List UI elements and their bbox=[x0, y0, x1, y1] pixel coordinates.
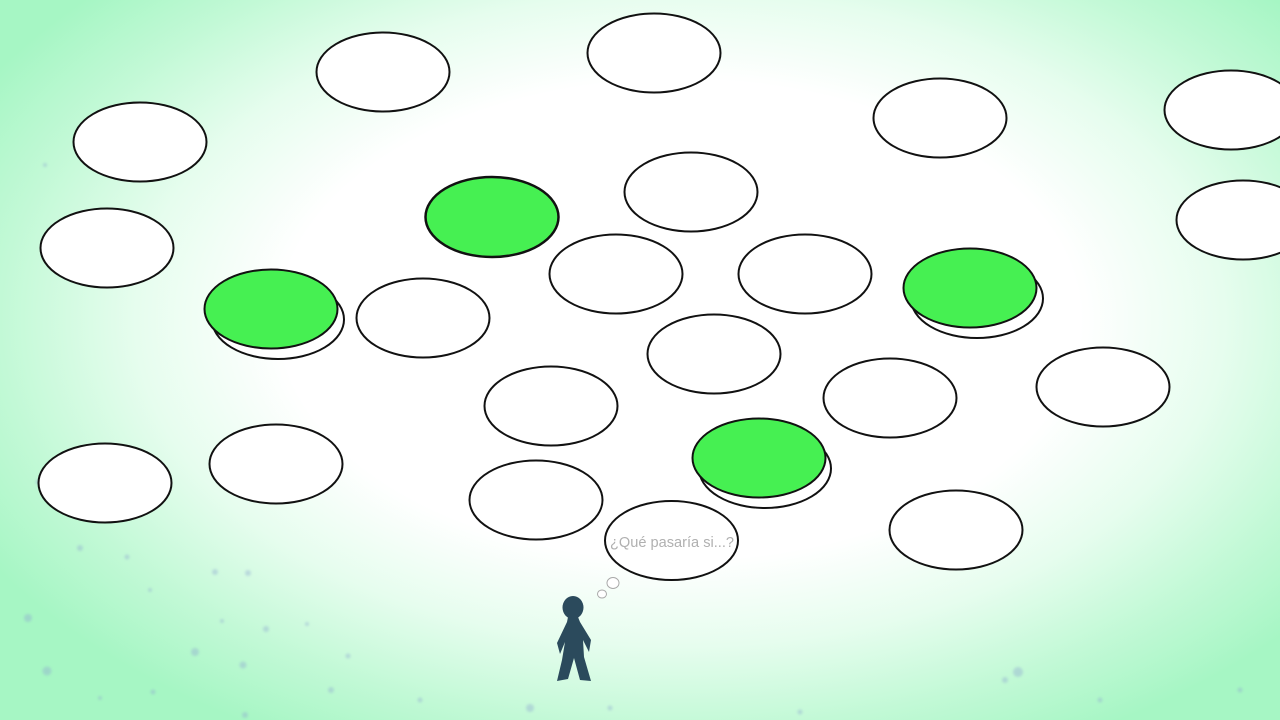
bubble 12 bbox=[648, 314, 780, 394]
bubble 10 bbox=[738, 234, 872, 314]
green bubble 3 bbox=[904, 248, 1036, 328]
bubble 16 bbox=[210, 424, 342, 504]
icon: person silhouette bbox=[557, 596, 591, 681]
bubble 6 bbox=[40, 208, 174, 288]
thought bubble with question bbox=[605, 501, 738, 580]
bubble 8 bbox=[624, 152, 758, 232]
bubble 13 bbox=[484, 366, 618, 446]
bubble 2 bbox=[588, 14, 720, 92]
bubble 17 bbox=[38, 444, 172, 522]
bubble 5 bbox=[74, 102, 206, 182]
bubble 11 bbox=[356, 278, 490, 358]
bubble 19 bbox=[890, 490, 1022, 570]
offset bubble behind green 3 bbox=[911, 259, 1043, 338]
white bubbles bbox=[38, 14, 1280, 570]
bubble 7 bbox=[1176, 180, 1280, 260]
bubble 18 bbox=[470, 460, 602, 540]
offset bubble behind green 4 bbox=[699, 429, 831, 508]
question text: ¿Qué pasaría si...? bbox=[610, 534, 734, 551]
green bubble 4 bbox=[692, 418, 826, 498]
background speckles bbox=[24, 163, 1242, 718]
offset bubble behind green 2 bbox=[212, 280, 344, 359]
bubble 3 bbox=[874, 78, 1006, 158]
thought dots bbox=[598, 578, 619, 598]
green bubble 2 bbox=[204, 270, 338, 348]
bubble 1 bbox=[316, 32, 450, 112]
green bubbles bbox=[204, 177, 1036, 498]
bubble 14 bbox=[824, 358, 956, 438]
bubble 15 bbox=[1036, 348, 1170, 426]
bubble 4 bbox=[1164, 70, 1280, 150]
bubble 9 bbox=[550, 234, 682, 314]
green bubble 1 bbox=[426, 177, 558, 257]
